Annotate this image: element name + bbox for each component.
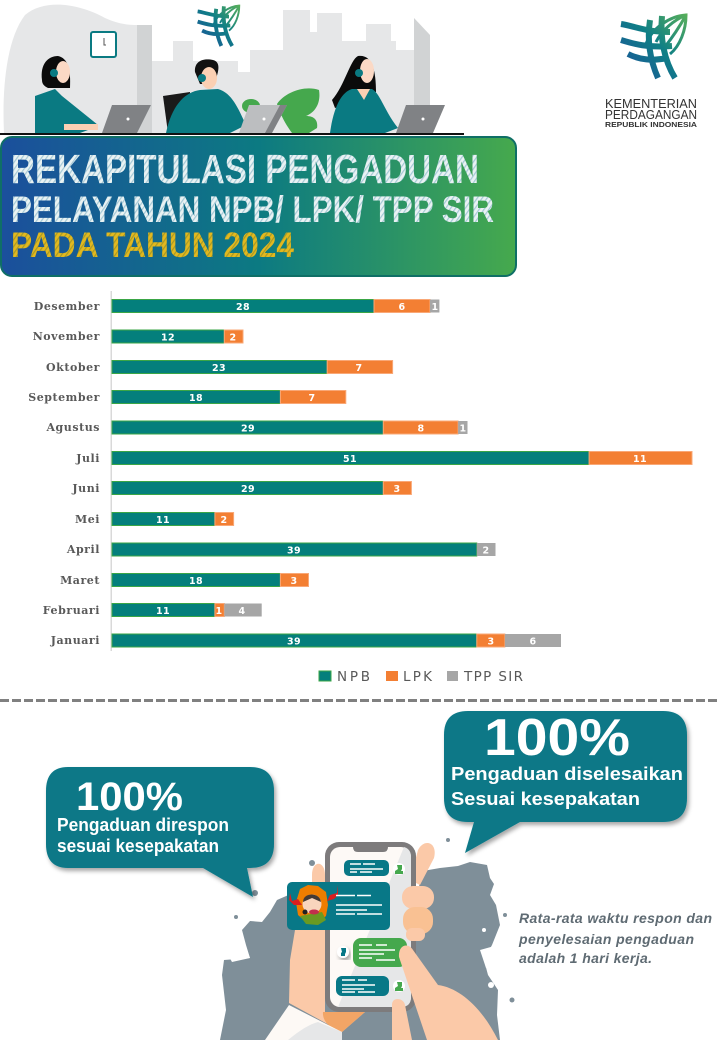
note: average response time xyxy=(518,910,712,966)
row: Mei: 11 xyxy=(156,515,170,526)
title line 3: PADA TAHUN 2024 xyxy=(11,226,294,265)
row: Agustus: Agustus xyxy=(45,421,100,434)
row: November: 12 xyxy=(161,332,175,343)
icon: laptop right xyxy=(396,105,445,133)
icon: laptop middle xyxy=(239,105,287,133)
left hand xyxy=(265,864,365,1040)
row: Juni xyxy=(71,482,411,495)
avatar top xyxy=(393,863,405,875)
row: September: 18 xyxy=(189,393,203,404)
grey splash xyxy=(220,838,514,1040)
row: November xyxy=(33,330,243,343)
stat: 100 percent responded: 100% xyxy=(76,775,183,819)
row: Oktober: 7 xyxy=(355,363,363,374)
chat bubble top xyxy=(344,860,389,876)
chart legend: LPK xyxy=(403,669,433,685)
row: Juni: Juni xyxy=(71,482,100,495)
logo: Kementerian Perdagangan: PERDAGANGAN xyxy=(605,108,697,122)
row: Juli: 11 xyxy=(633,454,647,465)
chat bubble bottom xyxy=(336,976,389,996)
icon: wall clock xyxy=(91,32,116,57)
row: Juni: 29 xyxy=(241,484,255,495)
row: Desember: 6 xyxy=(398,302,406,313)
chart legend: NPB xyxy=(337,669,370,685)
row: Agustus: 29 xyxy=(241,423,255,434)
row: Agustus: 1 xyxy=(459,423,467,434)
row: Oktober: Oktober xyxy=(46,361,100,374)
stacked bar chart xyxy=(28,291,692,651)
row: Juli xyxy=(75,452,692,465)
logo: Kementerian Perdagangan xyxy=(605,15,698,129)
right hand fingers xyxy=(392,886,498,1040)
text: responded caption xyxy=(57,815,229,856)
avatar middle xyxy=(337,946,349,958)
row: Juni: 3 xyxy=(393,484,401,495)
row: Maret: Maret xyxy=(60,574,100,587)
row: Maret: 3 xyxy=(290,576,298,587)
note: average response time: Rata-rata waktu respon dan xyxy=(519,910,712,926)
row: September: 7 xyxy=(308,393,316,404)
title line 2: PELAYANAN NPB/ LPK/ TPP SIR xyxy=(11,189,494,230)
row: April: April xyxy=(66,543,100,556)
background skyline xyxy=(4,5,430,133)
right fingers behind phone xyxy=(410,843,435,885)
row: Februari: 11 xyxy=(156,606,170,617)
row: April: 39 xyxy=(287,545,301,556)
text: resolved caption: Sesuai kesepakatan xyxy=(451,789,640,809)
row: Juli: 51 xyxy=(343,454,357,465)
chart legend xyxy=(319,669,523,685)
white splash specks xyxy=(228,928,498,988)
row: Januari: 6 xyxy=(529,636,537,647)
person: left agent xyxy=(35,56,98,133)
row: Agustus xyxy=(45,421,468,434)
illustration: hands holding phone on splash xyxy=(220,838,514,1040)
row: Desember: 1 xyxy=(431,302,439,313)
row: Januari: 3 xyxy=(487,636,495,647)
complaint card xyxy=(287,882,390,930)
phone xyxy=(325,842,416,1012)
note: average response time: adalah 1 hari kerja. xyxy=(519,950,652,966)
speech bubble right xyxy=(444,709,687,853)
row: November: November xyxy=(33,330,100,343)
text: resolved caption: Pengaduan diselesaikan xyxy=(451,764,683,784)
row: Februari: 4 xyxy=(238,606,246,617)
chart legend: TPP SIR xyxy=(463,669,523,685)
row: Oktober: 23 xyxy=(212,363,226,374)
row: Agustus: 8 xyxy=(417,423,425,434)
stat: 100 percent resolved: 100% xyxy=(484,709,630,767)
row: Januari: 39 xyxy=(287,636,301,647)
row: Februari xyxy=(43,604,262,617)
text: responded caption: Pengaduan direspon xyxy=(57,815,229,835)
person: middle agent xyxy=(163,59,246,133)
row: Mei: Mei xyxy=(75,513,100,526)
row: November: 2 xyxy=(229,332,237,343)
row: Januari xyxy=(50,634,561,647)
row: Mei: 2 xyxy=(220,515,228,526)
row: September xyxy=(28,390,346,404)
row: Januari: Januari xyxy=(50,634,100,647)
row: Mei xyxy=(75,512,234,526)
row: Maret: 18 xyxy=(189,576,203,587)
row: Desember: 28 xyxy=(236,302,250,313)
row: April: 2 xyxy=(482,545,490,556)
icon: laptop left xyxy=(102,105,151,133)
row: Maret xyxy=(60,574,308,587)
row: Februari: 1 xyxy=(215,606,223,617)
logo small xyxy=(198,6,239,46)
title banner xyxy=(1,137,516,276)
avatar bottom xyxy=(393,980,405,992)
text: resolved caption xyxy=(451,764,683,809)
row: Oktober xyxy=(46,360,393,374)
row: Desember xyxy=(34,300,439,313)
title line 1: REKAPITULASI PENGADUAN xyxy=(11,146,479,192)
row: April xyxy=(66,543,496,556)
text: responded caption: sesuai kesepakatan xyxy=(57,836,219,856)
row: Desember: Desember xyxy=(34,300,100,313)
logo: Kementerian Perdagangan: KEMENTERIAN xyxy=(605,97,697,111)
row: September: September xyxy=(28,391,100,404)
header illustration: call centre xyxy=(0,5,464,135)
logo: Kementerian Perdagangan: REPUBLIK INDONESIA xyxy=(605,120,698,129)
row: Juli: Juli xyxy=(75,452,100,465)
note: average response time: penyelesaian pengaduan xyxy=(518,931,694,947)
person: right agent xyxy=(330,56,398,133)
icon: angry caller xyxy=(289,885,338,925)
chat bubble green xyxy=(353,938,407,967)
row: Februari: Februari xyxy=(43,604,100,617)
icon: plant xyxy=(242,88,319,133)
speech bubble left xyxy=(46,767,274,897)
